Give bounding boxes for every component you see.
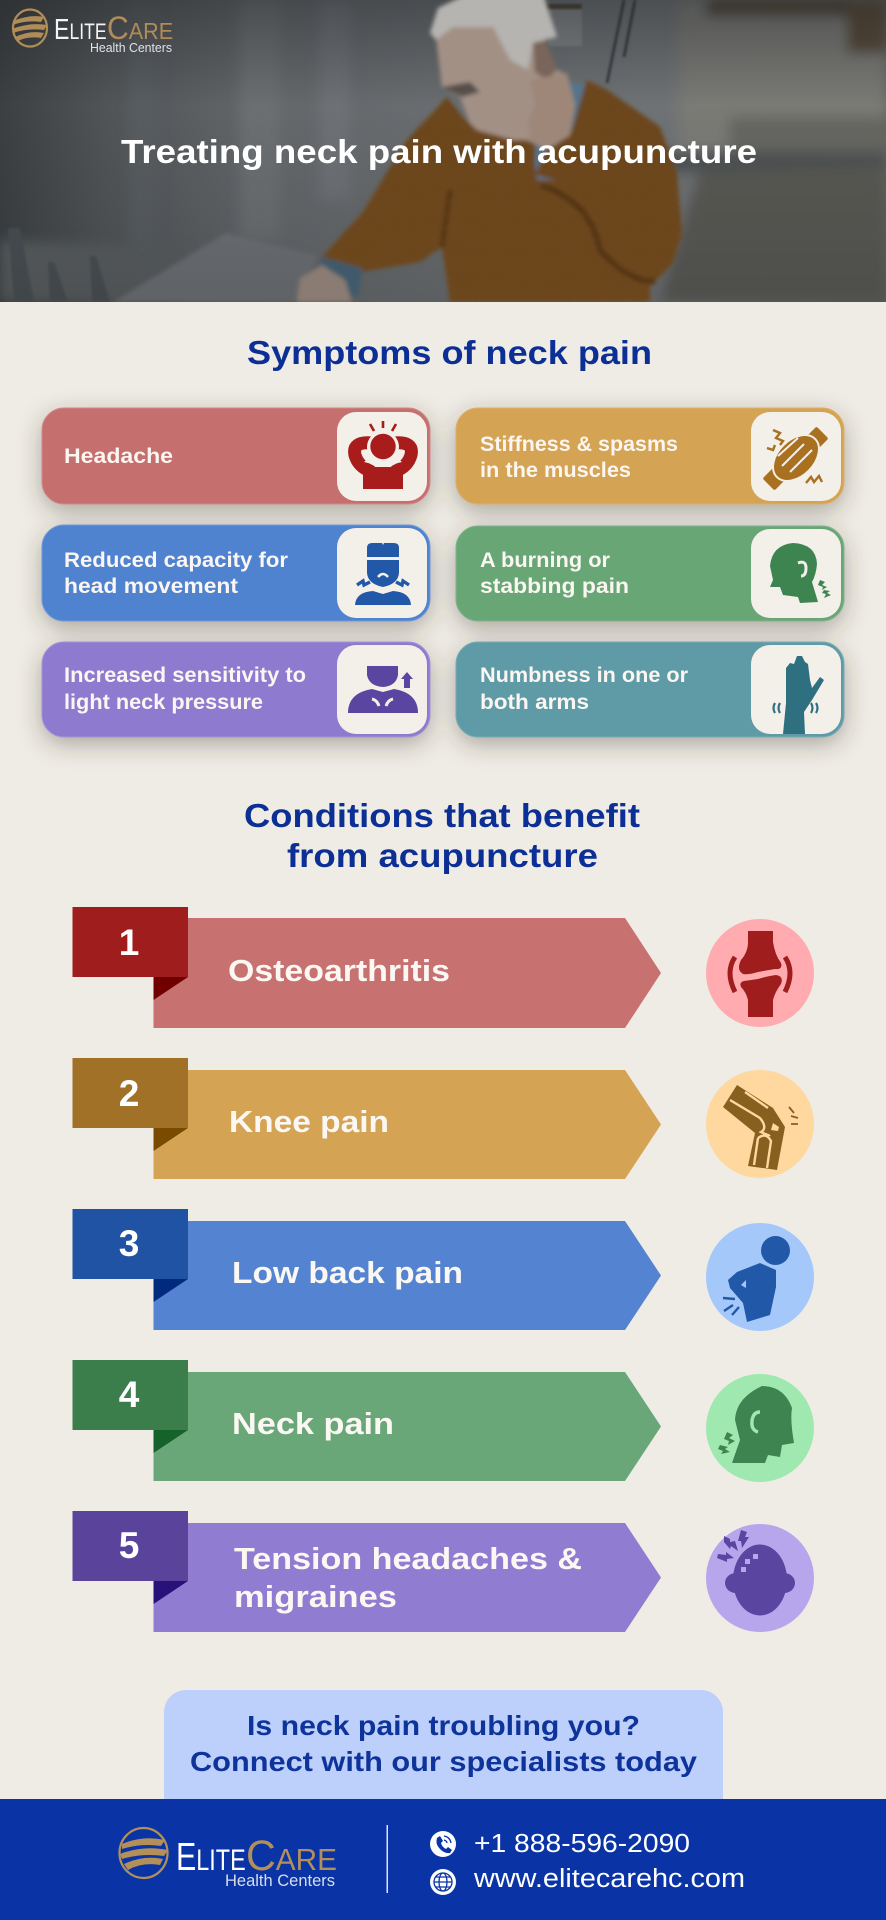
icon: head profile bbox=[770, 543, 831, 603]
card: numbness bbox=[456, 642, 844, 737]
card: stiffness bbox=[456, 408, 844, 504]
card: stiffness: in the muscles bbox=[480, 459, 631, 482]
condition 3: low back pain bbox=[72, 1209, 814, 1331]
logo: footer Elite Care: ELITE bbox=[176, 1835, 246, 1879]
card: burning pain: A burning or bbox=[480, 549, 610, 572]
condition 4: neck pain bbox=[72, 1360, 814, 1482]
condition 1: osteoarthritis bbox=[72, 907, 814, 1028]
condition 3: low back pain: 3 bbox=[119, 1223, 139, 1264]
call to action: Connect with our specialists today bbox=[190, 1746, 698, 1777]
card: increased sensitivity: Increased sensitivity to bbox=[64, 664, 306, 687]
condition 5: tension headaches bbox=[72, 1511, 814, 1632]
card: reduced head movement: head movement bbox=[64, 575, 238, 598]
heading: conditions bbox=[244, 798, 640, 875]
logo: top Elite Care bbox=[12, 10, 173, 55]
heading: conditions: from acupuncture bbox=[287, 838, 598, 875]
card shadows bbox=[42, 408, 844, 737]
title: Treating neck pain with acupuncture bbox=[121, 133, 757, 170]
logo: top Elite Care: CARE bbox=[107, 10, 173, 46]
panel: footer bbox=[0, 1799, 886, 1920]
card: numbness: Numbness in one or bbox=[480, 664, 688, 687]
icon: neck pressure bbox=[348, 666, 418, 713]
condition 1: osteoarthritis: Osteoarthritis bbox=[228, 953, 450, 988]
card: burning pain: stabbing pain bbox=[480, 575, 629, 598]
logo: top Elite Care: Health Centers bbox=[90, 41, 172, 55]
background photo scene bbox=[0, 0, 886, 302]
text: phone number: +1 888-596-2090 bbox=[474, 1830, 690, 1858]
condition 3: low back pain: Low back pain bbox=[232, 1255, 463, 1290]
card: increased sensitivity: light neck pressure bbox=[64, 691, 263, 714]
card: headache: Headache bbox=[64, 445, 173, 468]
card: increased sensitivity bbox=[42, 642, 430, 737]
call to action: Is neck pain troubling you? bbox=[247, 1710, 640, 1741]
logo: footer Elite Care: Health Centers bbox=[225, 1872, 335, 1890]
card: numbness: both arms bbox=[480, 691, 589, 714]
condition 2: knee pain: Knee pain bbox=[229, 1104, 389, 1139]
card: headache bbox=[42, 408, 430, 504]
call to action bbox=[164, 1690, 723, 1800]
icon: globe bbox=[430, 1869, 456, 1895]
panel: symptom cards bbox=[42, 408, 844, 737]
icon: knee bbox=[723, 1085, 798, 1170]
panel: condition list bbox=[72, 907, 814, 1632]
icon: phone bbox=[430, 1831, 456, 1857]
text: website: www.elitecarehc.com bbox=[473, 1865, 745, 1893]
icon: stiff head bbox=[355, 543, 411, 605]
panel: hero photo header bbox=[0, 0, 886, 302]
card: reduced head movement: Reduced capacity for bbox=[64, 549, 288, 572]
condition 2: knee pain: 2 bbox=[119, 1073, 139, 1114]
heading: conditions: Conditions that benefit bbox=[244, 798, 640, 835]
condition 4: neck pain: Neck pain bbox=[232, 1406, 394, 1441]
icon: headache bbox=[355, 421, 411, 489]
condition 4: neck pain: 4 bbox=[119, 1374, 140, 1415]
card: burning pain bbox=[456, 526, 844, 621]
icon: muscle spasm bbox=[762, 426, 829, 491]
card: reduced head movement bbox=[42, 525, 430, 621]
condition 1: osteoarthritis: 1 bbox=[119, 922, 139, 963]
condition 5: tension headaches: Tension headaches & bbox=[234, 1541, 582, 1576]
icon: migraine head bbox=[717, 1530, 795, 1616]
heading: symptoms: Symptoms of neck pain bbox=[247, 335, 652, 372]
condition 2: knee pain bbox=[72, 1058, 814, 1179]
icon: neck head bbox=[718, 1386, 794, 1463]
icon: joint bbox=[730, 931, 790, 1017]
logo: footer Elite Care: CARE bbox=[246, 1831, 337, 1879]
logo: footer Elite Care bbox=[120, 1828, 337, 1890]
icon: numb arm bbox=[774, 656, 824, 734]
condition 5: tension headaches: 5 bbox=[119, 1525, 139, 1566]
condition 5: tension headaches: migraines bbox=[234, 1579, 397, 1614]
logo: top Elite Care: ELITE bbox=[54, 12, 107, 46]
icon: low back bbox=[723, 1236, 790, 1322]
man holding neck bbox=[296, 0, 682, 302]
card: stiffness: Stiffness & spasms bbox=[480, 433, 678, 456]
